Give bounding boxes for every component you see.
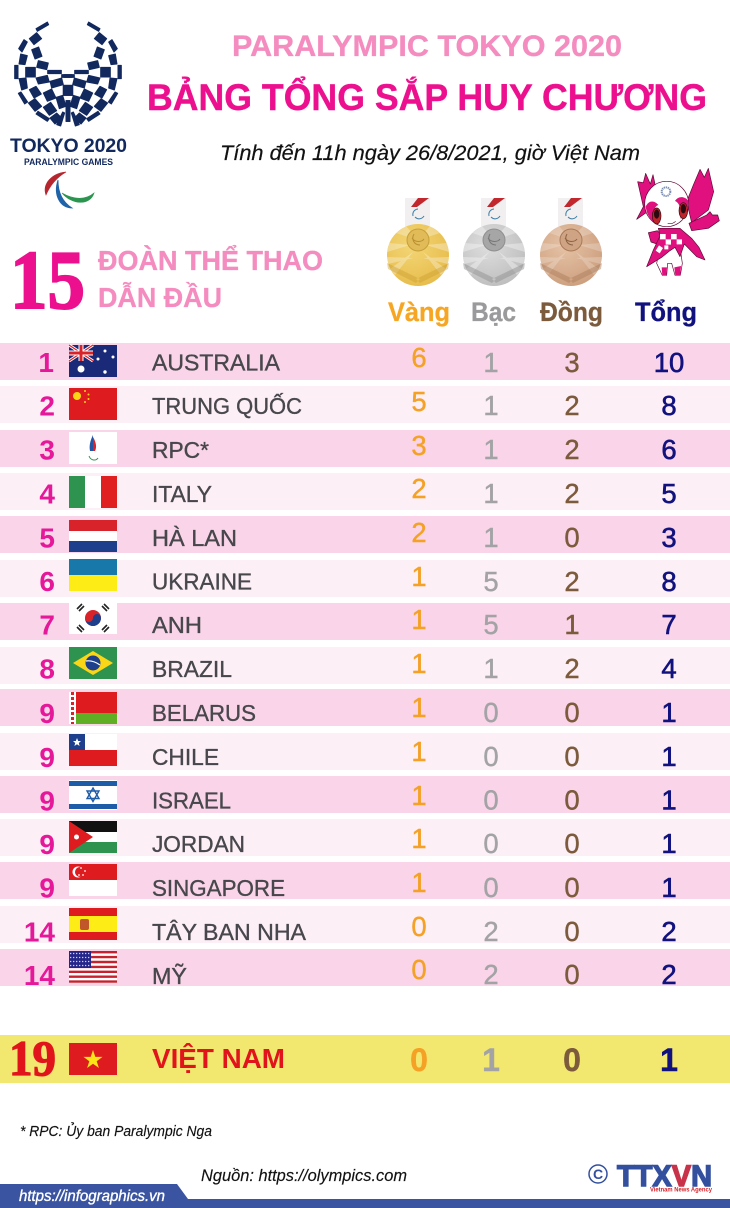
table row 10: Chile: CHILE bbox=[152, 744, 219, 770]
highlight row: Việt Nam bbox=[0, 1030, 730, 1086]
table row 15: Mỹ: 14 bbox=[24, 960, 55, 991]
table row 5: Hà Lan: HÀ LAN bbox=[152, 525, 237, 551]
table row 1: Australia: 6 bbox=[411, 342, 427, 373]
flag: RPC bbox=[69, 432, 117, 464]
table row 9: Belarus: 1 bbox=[411, 692, 427, 723]
flag: Israel bbox=[69, 780, 117, 810]
column headers: Đồng bbox=[540, 297, 603, 327]
flag: Korea bbox=[69, 602, 117, 634]
table row 10: Chile: 0 bbox=[564, 741, 580, 772]
table row 15: Mỹ bbox=[0, 949, 730, 991]
column headers: Vàng bbox=[388, 297, 450, 327]
table row 3: RPC: RPC* bbox=[152, 437, 209, 463]
footer link: https://infographics.vn bbox=[19, 1188, 165, 1205]
highlight row: Việt Nam: VIỆT NAM bbox=[152, 1043, 285, 1074]
table row 11: Israel bbox=[0, 776, 730, 816]
table row 11: Israel: 0 bbox=[483, 784, 499, 816]
table row 13: Singapore: 1 bbox=[661, 872, 677, 903]
table row 9: Belarus: 0 bbox=[564, 697, 580, 728]
table row 15: Mỹ: 0 bbox=[564, 959, 580, 990]
table row 2: Trung Quốc: 5 bbox=[411, 386, 427, 417]
table row 5: Hà Lan: 2 bbox=[411, 517, 427, 548]
logo subtitle: PARALYMPIC GAMES bbox=[24, 157, 113, 168]
table row 11: Israel: 1 bbox=[661, 784, 677, 816]
flag: Ukraine bbox=[69, 559, 117, 591]
table row 4: Italy: 2 bbox=[411, 473, 427, 504]
table row 7: Anh: 7 bbox=[661, 609, 677, 640]
table row 14: Tây Ban Nha bbox=[0, 906, 730, 948]
table row 1: Australia: AUSTRALIA bbox=[152, 350, 281, 376]
table row 8: Brazil bbox=[0, 647, 730, 684]
highlight row: Việt Nam: 0 bbox=[563, 1042, 581, 1078]
table row 13: Singapore: SINGAPORE bbox=[152, 875, 285, 901]
table row 1: Australia: 1 bbox=[483, 347, 499, 378]
table row 11: Israel: 0 bbox=[564, 784, 580, 816]
flag: Brazil bbox=[69, 647, 117, 679]
flag: Australia bbox=[69, 345, 117, 377]
table row 8: Brazil: 1 bbox=[483, 653, 499, 684]
table row 14: Tây Ban Nha: TÂY BAN NHA bbox=[152, 919, 307, 945]
table row 1: Australia: 3 bbox=[564, 347, 580, 378]
table row 6: Ukraine: 8 bbox=[661, 566, 677, 597]
table row 8: Brazil: 2 bbox=[564, 653, 580, 684]
table row 12: Jordan: JORDAN bbox=[152, 831, 245, 857]
table row 10: Chile: 1 bbox=[411, 736, 427, 767]
table row 1: Australia: 1 bbox=[38, 347, 54, 378]
flag: USA bbox=[69, 951, 117, 983]
table row 8: Brazil: 1 bbox=[411, 648, 427, 679]
flag: Netherlands bbox=[69, 520, 117, 552]
table row 7: Anh: 1 bbox=[411, 604, 427, 635]
table row 6: Ukraine: UKRAINE bbox=[152, 568, 252, 594]
table row 3: RPC: 1 bbox=[483, 434, 499, 465]
table row 13: Singapore: 0 bbox=[483, 872, 499, 903]
flag: Spain bbox=[69, 908, 117, 940]
logo: TTXVN: Vietnam News Agency bbox=[650, 1186, 712, 1194]
table row 1: Australia: 10 bbox=[654, 347, 684, 378]
logo: TTXVN: C bbox=[593, 1166, 603, 1182]
heading: Bảng tổng sắp huy chương: BẢNG TỔNG SẮP HUY CHƯƠNG bbox=[147, 75, 707, 118]
table row 14: Tây Ban Nha: 2 bbox=[661, 916, 677, 947]
table row 11: Israel: 9 bbox=[39, 786, 55, 816]
medal: silver bbox=[463, 198, 525, 286]
table row 14: Tây Ban Nha: 0 bbox=[564, 916, 580, 947]
table row 8: Brazil: 8 bbox=[39, 654, 55, 684]
table row 15: Mỹ: MỸ bbox=[152, 963, 187, 989]
flag: Italy bbox=[69, 476, 117, 508]
table row 2: Trung Quốc: 2 bbox=[564, 390, 580, 421]
subheading: Đoàn thể thao dẫn đầu: DẪN ĐẦU bbox=[98, 282, 222, 313]
table row 6: Ukraine bbox=[0, 559, 730, 597]
table row 5: Hà Lan: 5 bbox=[39, 522, 55, 554]
flag: Singapore bbox=[69, 864, 117, 896]
table row 2: Trung Quốc: 1 bbox=[483, 390, 499, 421]
source: Nguồn: https://olympics.com bbox=[201, 1166, 407, 1185]
table row 3: RPC: 3 bbox=[411, 430, 427, 461]
table row 9: Belarus: 9 bbox=[39, 698, 55, 729]
table row 7: Anh: 1 bbox=[564, 609, 580, 640]
logo: TTXVN: TTXVN bbox=[617, 1160, 712, 1193]
table row 9: Belarus: 0 bbox=[483, 697, 499, 728]
table row 2: Trung Quốc: TRUNG QUỐC bbox=[152, 392, 302, 419]
table row 3: RPC bbox=[0, 430, 730, 467]
table row 6: Ukraine: 6 bbox=[39, 566, 55, 597]
table row 4: Italy: 2 bbox=[564, 478, 580, 509]
table row 6: Ukraine: 2 bbox=[564, 566, 580, 597]
table row 12: Jordan bbox=[0, 819, 730, 860]
table row 15: Mỹ: 0 bbox=[411, 954, 427, 985]
medal: bronze bbox=[540, 198, 602, 286]
table row 5: Hà Lan bbox=[0, 516, 730, 554]
table row 10: Chile: 1 bbox=[661, 741, 677, 772]
mascot: Someity bbox=[637, 168, 719, 275]
table row 10: Chile: 9 bbox=[39, 742, 55, 773]
table row 9: Belarus: BELARUS bbox=[152, 700, 256, 726]
subheading: Đoàn thể thao dẫn đầu bbox=[98, 245, 323, 313]
rank 19: 19 bbox=[9, 1030, 56, 1086]
table row 4: Italy: ITALY bbox=[152, 481, 212, 507]
subheading: Đoàn thể thao dẫn đầu: ĐOÀN THỂ THAO bbox=[98, 245, 323, 276]
table row 7: Anh: 5 bbox=[483, 609, 499, 640]
table row 11: Israel: 1 bbox=[411, 780, 427, 811]
table row 2: Trung Quốc: 2 bbox=[39, 390, 55, 422]
logo wordmark: TOKYO 2020 bbox=[10, 135, 127, 157]
table row 3: RPC: 6 bbox=[661, 434, 677, 465]
table row 5: Hà Lan: 0 bbox=[564, 522, 580, 553]
footer bar bbox=[0, 1184, 730, 1208]
flag: Chile bbox=[69, 734, 117, 766]
table row 14: Tây Ban Nha: 2 bbox=[483, 916, 499, 947]
table row 4: Italy bbox=[0, 473, 730, 510]
title: Paralympic Tokyo 2020: PARALYMPIC TOKYO 2020 bbox=[232, 30, 622, 63]
column headers: Tổng bbox=[635, 297, 697, 327]
big number 15: 15 bbox=[10, 234, 85, 327]
flag: China bbox=[69, 388, 117, 420]
table row 1: Australia bbox=[0, 342, 730, 380]
table row 12: Jordan: 1 bbox=[411, 823, 427, 854]
table row 10: Chile: 0 bbox=[483, 741, 499, 772]
table row 2: Trung Quốc bbox=[0, 386, 730, 423]
highlight row: Việt Nam: 1 bbox=[482, 1042, 500, 1078]
highlight row: Việt Nam: 1 bbox=[660, 1042, 678, 1078]
footnote: * RPC: Ủy ban Paralympic Nga bbox=[20, 1122, 212, 1140]
table row 3: RPC: 3 bbox=[39, 434, 55, 466]
table row 15: Mỹ: 2 bbox=[661, 959, 677, 990]
flag: Jordan bbox=[69, 821, 117, 853]
table row 12: Jordan: 0 bbox=[564, 828, 580, 859]
table row 12: Jordan: 0 bbox=[483, 828, 499, 859]
table row 11: Israel: ISRAEL bbox=[152, 788, 231, 814]
table row 8: Brazil: BRAZIL bbox=[152, 656, 232, 682]
emblem: checkered wreath bbox=[15, 22, 121, 126]
table row 5: Hà Lan: 1 bbox=[483, 522, 499, 553]
table row 2: Trung Quốc: 8 bbox=[661, 390, 677, 421]
table row 5: Hà Lan: 3 bbox=[661, 522, 677, 553]
table row 6: Ukraine: 1 bbox=[411, 561, 427, 592]
logo: Tokyo 2020 Paralympic Games bbox=[10, 22, 127, 208]
flag: Vietnam bbox=[69, 1043, 117, 1075]
table row 3: RPC: 2 bbox=[564, 434, 580, 465]
table row 10: Chile bbox=[0, 733, 730, 773]
table row 9: Belarus bbox=[0, 689, 730, 729]
table row 8: Brazil: 4 bbox=[661, 653, 677, 684]
table row 6: Ukraine: 5 bbox=[483, 566, 499, 597]
table row 12: Jordan: 1 bbox=[661, 828, 677, 859]
table row 15: Mỹ: 2 bbox=[483, 959, 499, 990]
table row 4: Italy: 4 bbox=[39, 478, 55, 510]
table row 13: Singapore: 1 bbox=[411, 867, 427, 898]
table row 12: Jordan: 9 bbox=[39, 829, 55, 860]
column headers bbox=[388, 297, 697, 327]
table row 4: Italy: 5 bbox=[661, 478, 677, 509]
table row 7: Anh: 7 bbox=[39, 610, 55, 640]
table row 4: Italy: 1 bbox=[483, 478, 499, 509]
table row 7: Anh: ANH bbox=[152, 612, 202, 638]
icon: agitos bbox=[45, 172, 94, 208]
subtitle: date: Tính đến 11h ngày 26/8/2021, giờ Việt Nam bbox=[220, 141, 640, 165]
flag: Belarus bbox=[69, 692, 117, 724]
table row 14: Tây Ban Nha: 0 bbox=[411, 911, 427, 942]
table row 7: Anh bbox=[0, 602, 730, 640]
medal: gold bbox=[387, 198, 449, 286]
highlight row: Việt Nam: 0 bbox=[410, 1042, 428, 1078]
table row 9: Belarus: 1 bbox=[661, 697, 677, 728]
table row 13: Singapore: 0 bbox=[564, 872, 580, 903]
table row 13: Singapore: 9 bbox=[39, 872, 55, 904]
table row 13: Singapore bbox=[0, 862, 730, 904]
column headers: Bạc bbox=[471, 297, 516, 327]
table row 14: Tây Ban Nha: 14 bbox=[24, 916, 55, 948]
